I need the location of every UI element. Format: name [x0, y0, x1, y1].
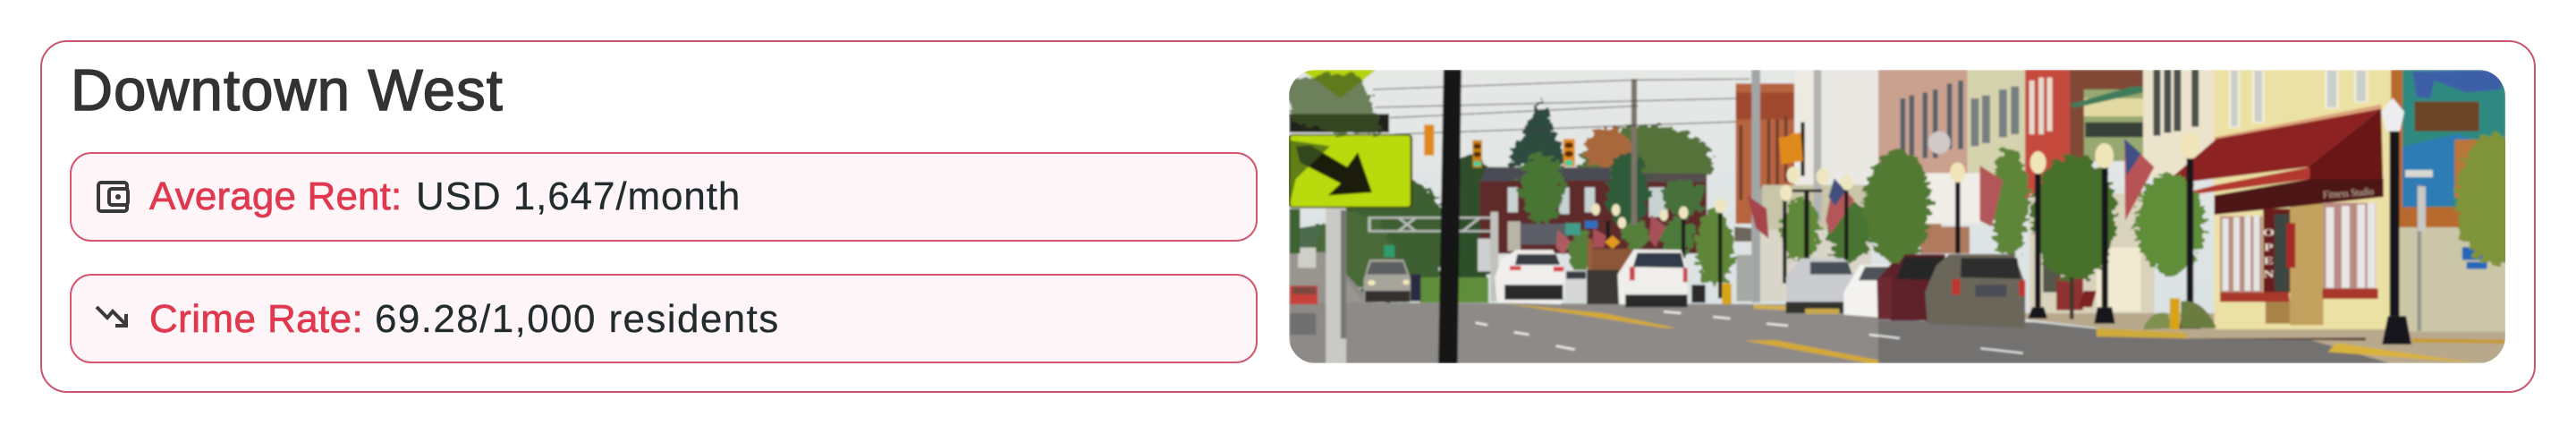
- distant camper and red car: [1298, 248, 1316, 268]
- top diamond sign: [1301, 70, 1376, 98]
- maroon van: [1885, 254, 1945, 320]
- lamp posts: [1606, 188, 1848, 298]
- sidewalk: [2025, 313, 2505, 363]
- panel: crime rate: [70, 274, 1258, 363]
- curbs: [2097, 328, 2188, 338]
- flags: [1979, 166, 2003, 226]
- trees and lamps: [1867, 149, 1930, 262]
- street name sign: [1290, 114, 1389, 132]
- left shop window: [2220, 217, 2262, 293]
- brick tower: [2070, 70, 2143, 159]
- wires: [1373, 79, 1814, 134]
- road: [1290, 252, 1941, 363]
- icon: wallet: [97, 181, 130, 213]
- white car: [1843, 265, 1888, 318]
- panel: average rent: [70, 152, 1258, 242]
- hydrant: [1722, 284, 1732, 304]
- silver SUV: [1784, 256, 1853, 302]
- black foreground pole: [1438, 70, 1462, 363]
- maroon van: [1876, 261, 1900, 319]
- right half of street scene: O: [2263, 227, 2275, 238]
- plain wall: [2398, 227, 2505, 332]
- left half of street scene: [1290, 70, 1941, 363]
- background trees: [1505, 98, 1570, 167]
- grass: [1419, 277, 1488, 302]
- right shop window: [2324, 203, 2376, 289]
- icon: trending down arrow: [95, 306, 128, 328]
- white SUV one: [1495, 250, 1564, 304]
- cream clapboard building: [1968, 70, 2025, 189]
- right half of street scene: P: [2264, 243, 2274, 253]
- right half of street scene: [1867, 70, 2532, 363]
- utility pole: [1631, 79, 1637, 226]
- street trees: [1865, 152, 1929, 262]
- right tree: [2457, 134, 2532, 266]
- right half of street scene: N: [2263, 269, 2275, 280]
- blue signs: [2462, 247, 2485, 260]
- mid trees: [1520, 153, 1564, 223]
- red building: [2025, 70, 2070, 198]
- text: average rent label: Average Rent:: [149, 174, 402, 218]
- brick storefront: [1736, 83, 1794, 224]
- flags: [1748, 195, 1768, 239]
- brick house: [1479, 179, 1707, 253]
- pedestrian sign and arrow: [1290, 135, 1411, 208]
- curb: [1754, 304, 1786, 311]
- grey van: [1925, 254, 2025, 328]
- right half of street scene: E: [2264, 256, 2274, 267]
- panel: Downtown West card: [40, 40, 2536, 393]
- green storefront: [2084, 89, 2143, 161]
- awning: [2163, 109, 2381, 185]
- title: Downtown West: [71, 57, 504, 123]
- pink building: [1895, 70, 1941, 159]
- street sign post: [2417, 185, 2421, 331]
- white SUV two: [1618, 250, 1688, 307]
- hydrant: [2170, 298, 2180, 329]
- white ornate building: [2143, 70, 2215, 177]
- yellow brick building: [2215, 70, 2393, 329]
- mural: [2391, 70, 2505, 228]
- tree leaves: [1290, 73, 1384, 134]
- truck: [1588, 239, 1593, 271]
- lamp posts: [1955, 132, 2411, 345]
- text: crime rate label: Crime Rate:: [149, 297, 363, 341]
- road: [1878, 320, 2390, 363]
- text: crime rate value: 69.28/1,000 residents: [375, 297, 780, 341]
- traffic lights: [1424, 124, 1803, 167]
- upper windows: [2230, 70, 2367, 127]
- pink building: [1878, 70, 1968, 174]
- photo: small-town main street: [1289, 70, 2505, 363]
- road markings: [1501, 303, 1677, 328]
- sign post: [1326, 208, 1346, 363]
- lower storefront: [2029, 194, 2154, 313]
- grey post: [1751, 70, 1760, 302]
- fitness sign: Fitness Studio: [2321, 185, 2375, 201]
- benches and bushes: [2079, 291, 2097, 307]
- rail gantry: [1369, 217, 1493, 231]
- white building: [1792, 88, 1815, 184]
- oncoming silver car: [1363, 260, 1411, 302]
- text: average rent value: USD 1,647/month: [416, 174, 741, 218]
- shop door and open sign: [2263, 208, 2290, 293]
